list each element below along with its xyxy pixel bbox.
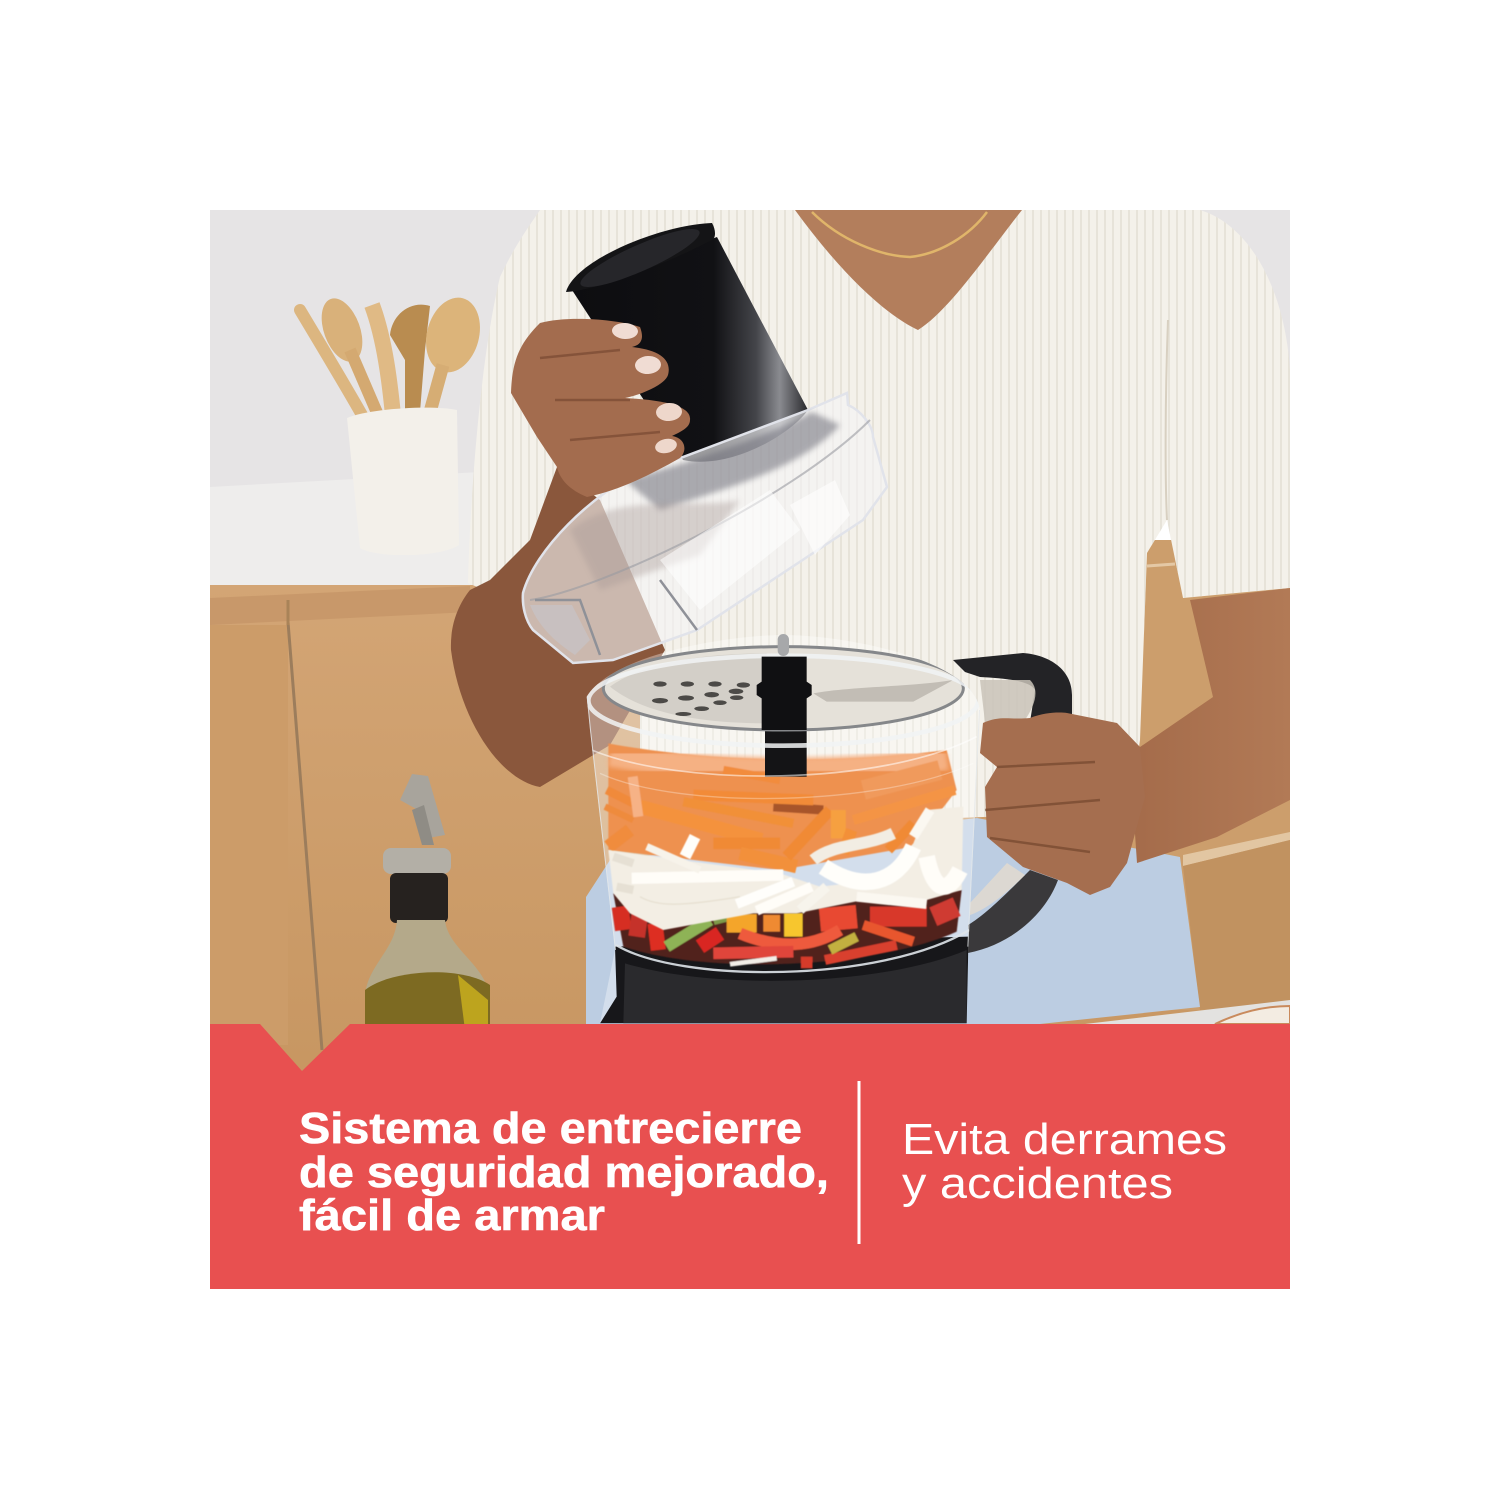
black handle xyxy=(953,653,1072,953)
heading: feature title: fácil de armar xyxy=(299,1191,605,1240)
heading: feature title xyxy=(299,1104,829,1240)
divider line xyxy=(858,1081,860,1244)
counter top xyxy=(210,472,474,585)
central black spindle xyxy=(757,657,812,730)
left arm xyxy=(451,467,665,787)
grater holes xyxy=(652,681,750,716)
spindle tip xyxy=(778,634,789,656)
layer: carrots xyxy=(605,743,957,870)
heading: feature title: Sistema de entrecierre xyxy=(299,1104,802,1153)
black base xyxy=(600,937,992,1023)
layer: peppers xyxy=(613,890,962,968)
right arm xyxy=(1130,588,1290,863)
neck and necklace xyxy=(795,210,1022,330)
photo: kitchen scene with food processor xyxy=(210,210,1290,1090)
hand holding lid xyxy=(511,319,690,497)
text: benefit xyxy=(902,1115,1227,1208)
layer: onions xyxy=(608,807,963,930)
white ribbed shirt xyxy=(468,210,1290,830)
red banner with notch xyxy=(210,1024,1290,1289)
bowl glass xyxy=(587,635,980,1023)
oil bottle xyxy=(365,774,490,1030)
grating disc xyxy=(603,647,963,730)
kitchen wall xyxy=(210,210,1290,500)
jeans xyxy=(586,818,1200,1024)
food processor bowl, in local coordinates xyxy=(587,634,992,1023)
utensil holder with wooden spoons xyxy=(294,298,480,479)
bowl rim arcs xyxy=(592,737,977,776)
clear lid xyxy=(523,393,887,663)
heading: feature title: de seguridad mejorado, xyxy=(299,1148,829,1197)
white counter and plate xyxy=(1086,1000,1290,1024)
hand holding handle xyxy=(980,713,1145,895)
spindle lower shaft xyxy=(765,730,807,777)
lid feed tube xyxy=(566,220,808,462)
text: benefit: Evita derrames xyxy=(902,1115,1227,1164)
wood cabinets xyxy=(210,540,1290,1090)
text: benefit: y accidentes xyxy=(902,1159,1173,1208)
